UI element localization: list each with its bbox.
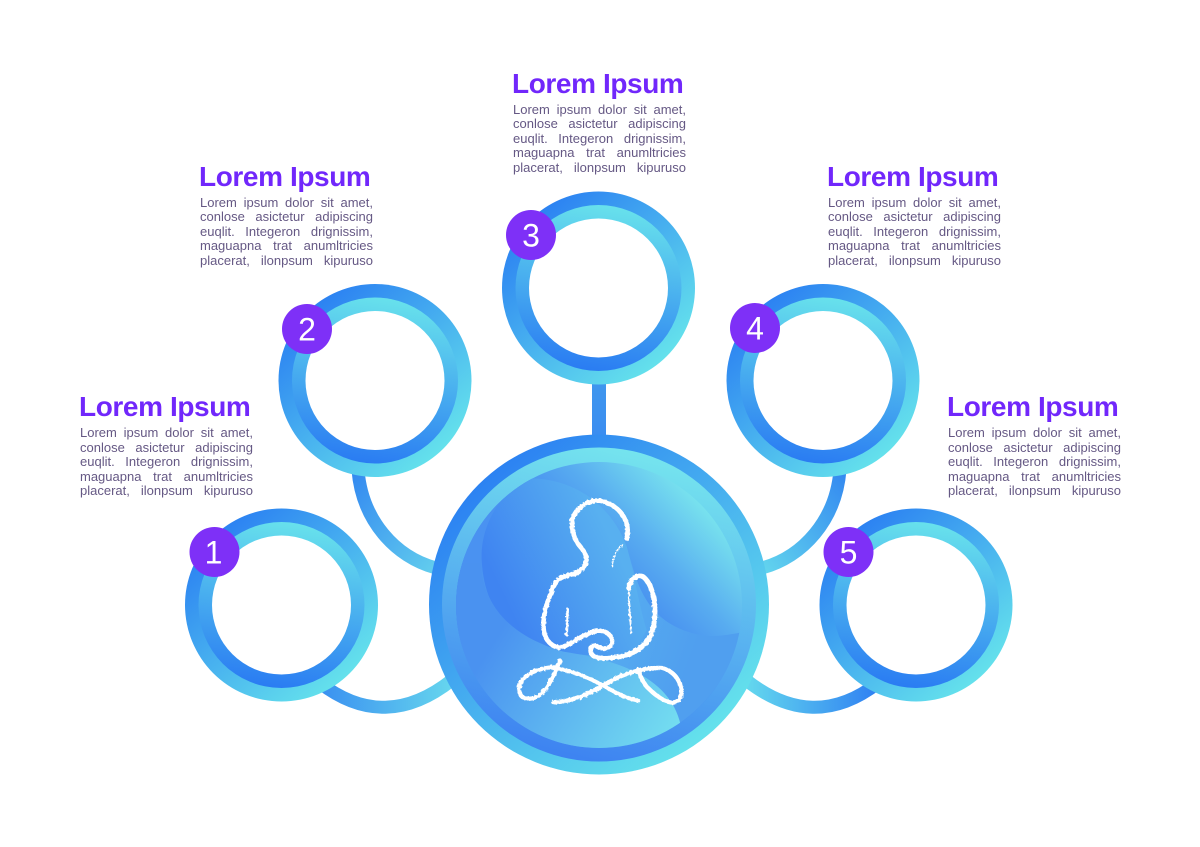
text block 5: euqlit. Integeron drignissim, xyxy=(948,454,1121,469)
text block 1: euqlit. Integeron drignissim, xyxy=(80,454,253,469)
text block 5: placerat, ilonpsum kipuruso xyxy=(948,483,1121,498)
ring 4 xyxy=(726,284,920,477)
connector: ring 1 to hub xyxy=(320,680,452,707)
text block 4: conlose asictetur adipiscing xyxy=(828,209,1001,224)
icon: meditating figure xyxy=(519,501,681,703)
text block 5: maguapna trat anumltricies xyxy=(948,469,1121,484)
connector: ring 3 to hub xyxy=(592,380,606,440)
text: Lorem Ipsum xyxy=(512,68,683,98)
badge 3: 3 xyxy=(522,218,540,254)
connector: ring 5 to hub xyxy=(746,680,878,707)
badge 1: 1 xyxy=(205,534,222,570)
text: Lorem Ipsum xyxy=(79,391,250,422)
badge 5: 5 xyxy=(840,534,857,570)
text: Lorem Ipsum xyxy=(827,160,998,192)
text block 2: Lorem ipsum dolor sit amet, xyxy=(200,194,373,210)
ring 5 xyxy=(820,508,1012,702)
central hub xyxy=(429,434,769,774)
text block 4: placerat, ilonpsum kipuruso xyxy=(828,253,1001,268)
text block 4: euqlit. Integeron drignissim, xyxy=(828,224,1001,239)
ring 3 xyxy=(502,192,695,384)
text block 4: Lorem ipsum dolor sit amet, xyxy=(828,194,1001,210)
text block 3 xyxy=(512,68,686,175)
badge 1 xyxy=(190,527,240,577)
text block 2: maguapna trat anumltricies xyxy=(200,238,373,253)
diagram xyxy=(185,192,1012,774)
connector: ring 2 to hub xyxy=(358,470,436,568)
badge 2 xyxy=(282,304,332,354)
ring 2 xyxy=(278,284,472,477)
text block 1: maguapna trat anumltricies xyxy=(80,469,253,484)
hub inner disc xyxy=(450,457,750,757)
text block 2: conlose asictetur adipiscing xyxy=(200,209,373,224)
text block 3: Lorem ipsum dolor sit amet, xyxy=(513,102,686,116)
text block 1: Lorem ipsum dolor sit amet, xyxy=(80,425,253,440)
text: Lorem Ipsum xyxy=(199,160,370,192)
text block 5: conlose asictetur adipiscing xyxy=(948,440,1121,455)
text: Lorem Ipsum xyxy=(947,391,1118,422)
text block 5: Lorem ipsum dolor sit amet, xyxy=(948,425,1121,440)
connector: ring 4 to hub xyxy=(762,470,840,568)
text block 4 xyxy=(827,160,1001,268)
badge 4: 4 xyxy=(746,310,764,346)
text block 5 xyxy=(947,391,1121,498)
badge 5 xyxy=(824,527,874,577)
text block 1 xyxy=(79,391,253,498)
text block 3: euqlit. Integeron drignissim, xyxy=(513,131,686,146)
ring 1 xyxy=(185,508,378,702)
badge 2: 2 xyxy=(298,312,316,348)
text block 4: maguapna trat anumltricies xyxy=(828,238,1001,253)
text block 3: placerat, ilonpsum kipuruso xyxy=(513,160,686,175)
text block 2 xyxy=(199,160,373,268)
text block 1: conlose asictetur adipiscing xyxy=(80,440,253,455)
text block 2: placerat, ilonpsum kipuruso xyxy=(200,253,373,268)
text block 3: conlose asictetur adipiscing xyxy=(513,116,686,131)
text block 1: placerat, ilonpsum kipuruso xyxy=(80,483,253,498)
text block 3: maguapna trat anumltricies xyxy=(513,145,686,160)
badge 4 xyxy=(730,303,780,353)
badge 3 xyxy=(506,210,556,260)
text block 2: euqlit. Integeron drignissim, xyxy=(200,224,373,239)
